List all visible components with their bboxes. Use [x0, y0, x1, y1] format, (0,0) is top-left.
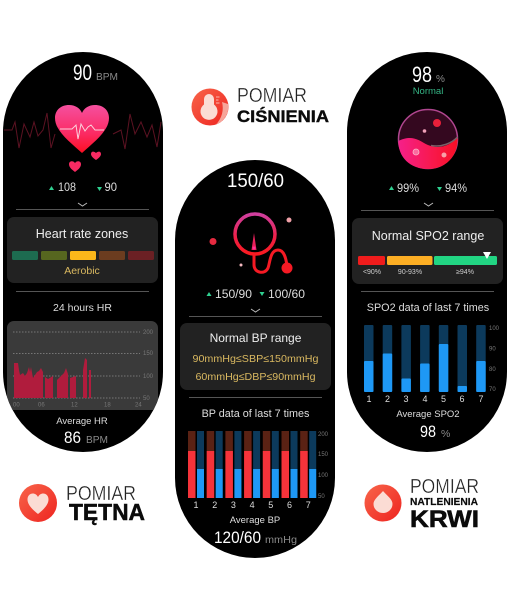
- card: normal SpO2 range: 90-93%: [398, 269, 422, 276]
- average heart rate: BPM: [86, 434, 108, 446]
- card: normal SpO2 range: [352, 218, 503, 284]
- max and min heart rate: 108: [58, 180, 76, 194]
- average heart rate: 86: [64, 429, 81, 447]
- heading: BP data: BP data of last 7 times: [202, 408, 310, 420]
- chart: 24 hours heart rate: 24: [135, 402, 142, 408]
- card: normal BP range: [180, 323, 331, 390]
- bar chart: SpO2 data: 7: [478, 394, 484, 404]
- chart: 24 hours heart rate: 12: [71, 402, 78, 408]
- max and min SpO2: 94%: [445, 181, 467, 195]
- chart: 24 hours heart rate: [7, 321, 158, 410]
- logo: pomiar natlenienia krwi: NATLENIENIA: [410, 496, 478, 508]
- chart: 24 hours heart rate: 200: [143, 330, 154, 336]
- chevron: [424, 203, 433, 206]
- average SpO2: 98: [420, 422, 436, 441]
- max and min heart rate: 90: [104, 180, 117, 194]
- SpO2 reading: Normal: [413, 86, 443, 97]
- max and min pressure: 100/60: [268, 289, 305, 301]
- bar chart: SpO2 data: [364, 325, 500, 404]
- average BP: Average BP: [230, 515, 280, 526]
- card: normal BP range: 90mmHg≤SBP≤150mmHg: [192, 353, 319, 365]
- bar chart: SpO2 data: 80: [489, 367, 496, 373]
- heart rate reading: [73, 60, 118, 85]
- panel: blood pressure phone: [175, 160, 335, 558]
- card: normal BP range: 60mmHg≤DBP≤90mmHg: [196, 371, 316, 383]
- bar chart: BP data: 2: [212, 500, 217, 510]
- bar chart: BP data: 4: [250, 500, 255, 510]
- average SpO2: %: [441, 428, 450, 440]
- chart: 24 hours heart rate: 06: [38, 402, 45, 408]
- max and min pressure: 150/90: [215, 289, 252, 301]
- logo: pomiar ciśnienia: CIŚNIENIA: [237, 107, 329, 126]
- card: normal BP range: Normal BP range: [210, 331, 302, 345]
- heart rate reading: 90: [73, 60, 92, 85]
- max and min pressure: [206, 289, 305, 301]
- bar chart: BP data: 1: [193, 500, 199, 510]
- bar chart: SpO2 data: 1: [366, 394, 372, 404]
- bar chart: BP data: [188, 431, 329, 510]
- chart: 24 hours heart rate: 00: [13, 402, 20, 408]
- icon: blood oxygen sphere: [398, 110, 458, 169]
- bar chart: BP data: 5: [268, 500, 273, 510]
- SpO2 reading: %: [436, 74, 445, 85]
- blood pressure reading: 150/60: [227, 170, 284, 192]
- heading: SpO2 data: SPO2 data of last 7 times: [367, 302, 490, 314]
- bar chart: SpO2 data: 100: [489, 326, 500, 332]
- logo: pomiar ciśnienia: POMIAR: [237, 84, 307, 107]
- bar chart: BP data: 100: [318, 473, 329, 479]
- card: normal SpO2 range: <90%: [363, 269, 381, 276]
- bar chart: BP data: 6: [287, 500, 292, 510]
- bar chart: BP data: 7: [306, 500, 311, 510]
- card: heart rate zones: Aerobic: [64, 265, 100, 277]
- icon: pressure gauge: [210, 214, 292, 274]
- average SpO2: Average SPO2: [396, 409, 460, 420]
- chart: 24 hours heart rate: 100: [143, 374, 154, 380]
- heart rate reading: BPM: [96, 71, 118, 83]
- chart: 24 hours heart rate: 18: [104, 402, 111, 408]
- panel: SpO2 phone: [347, 52, 507, 452]
- chevron: [251, 309, 260, 312]
- card: normal SpO2 range: Normal SPO2 range: [372, 229, 484, 243]
- bar chart: SpO2 data: 70: [489, 387, 496, 393]
- average BP: [214, 515, 297, 547]
- bar chart: BP data: 50: [318, 494, 325, 500]
- bar chart: SpO2 data: 90: [489, 346, 496, 352]
- logo: pomiar natlenienia krwi: KRWI: [410, 506, 479, 533]
- average BP: mmHg: [265, 534, 297, 546]
- chevron: [78, 203, 87, 206]
- logo: pomiar tętna: TĘTNA: [69, 499, 145, 525]
- icon: heart: [55, 105, 109, 172]
- icon: heart badge: [19, 484, 57, 522]
- max and min heart rate: [49, 180, 117, 194]
- SpO2 reading: [412, 62, 445, 97]
- card: heart rate zones: [7, 217, 158, 283]
- bar chart: SpO2 data: 6: [459, 394, 465, 404]
- bar chart: BP data: 150: [318, 452, 329, 458]
- panel: heart rate phone: [3, 52, 163, 452]
- card: normal SpO2 range: ≥94%: [456, 269, 474, 276]
- max and min SpO2: [389, 181, 467, 195]
- bar chart: BP data: 200: [318, 432, 329, 438]
- average BP: 120/60: [214, 528, 261, 547]
- logo: pomiar natlenienia krwi: POMIAR: [410, 475, 479, 498]
- SpO2 reading: 98: [412, 62, 432, 87]
- ecg line: [4, 113, 161, 149]
- average heart rate: [56, 416, 108, 447]
- bar chart: SpO2 data: 5: [441, 394, 446, 404]
- logo: pomiar tętna: [19, 482, 145, 525]
- icon: blood drop: [364, 484, 402, 522]
- bar chart: BP data: 3: [231, 500, 236, 510]
- average SpO2: [396, 409, 460, 441]
- average heart rate: Average HR: [56, 416, 108, 427]
- max and min SpO2: 99%: [397, 181, 419, 195]
- logo: pomiar tętna: POMIAR: [66, 482, 136, 505]
- logo: pomiar ciśnienia: [192, 84, 329, 126]
- chart: 24 hours heart rate: 150: [143, 351, 154, 357]
- card: heart rate zones: Heart rate zones: [36, 227, 128, 241]
- bar chart: SpO2 data: 2: [385, 394, 390, 404]
- icon: thermometer: [192, 88, 228, 126]
- chart: 24 hours heart rate: 50: [143, 396, 150, 402]
- bar chart: SpO2 data: 4: [422, 394, 428, 404]
- bar chart: SpO2 data: 3: [403, 394, 409, 404]
- heading: 24 hours HR: 24 hours HR: [53, 302, 112, 314]
- logo: pomiar natlenienia krwi: [364, 475, 479, 533]
